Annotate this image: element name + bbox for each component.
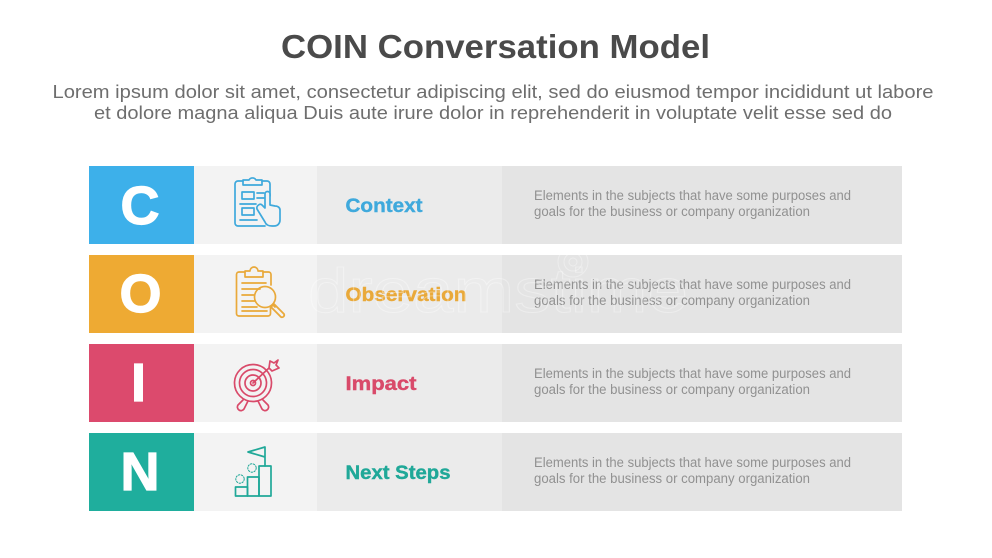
letter tile C: C [120, 176, 160, 236]
icon: steps with flag [236, 447, 271, 496]
description: Impact: goals for the business or company organization [534, 382, 810, 397]
letter tile N: N [120, 442, 160, 502]
description: Context: Elements in the subjects that have some purposes and [534, 188, 851, 203]
description: Observation: goals for the business or company organization [534, 293, 810, 308]
label: Impact: Impact [346, 374, 417, 395]
description: Next Steps [534, 455, 851, 486]
letter tile I [89, 344, 194, 422]
panel: Observation row [89, 255, 902, 333]
panel: Context row [89, 166, 902, 244]
subtitle text: Lorem ipsum dolor sit amet, consectetur adipiscing elit, sed do eiusmod tempor incididunt ut labore [52, 81, 934, 102]
description: Impact: Elements in the subjects that have some purposes and [534, 366, 851, 381]
description: Context: goals for the business or company organization [534, 204, 810, 219]
icon: clipboard with pointing hand [235, 178, 280, 226]
description: Impact [534, 366, 851, 397]
description: Observation [534, 277, 851, 308]
panel: Next Steps row [89, 433, 902, 511]
description: Next Steps: goals for the business or company organization [534, 471, 810, 486]
letter tile N [89, 433, 194, 511]
description: Observation: Elements in the subjects that have some purposes and [534, 277, 851, 292]
letter tile C [89, 166, 194, 244]
description: Context [534, 188, 851, 219]
letter tile O: O [119, 264, 162, 324]
icon: target with arrow [234, 360, 279, 411]
letter tile I: I [131, 353, 146, 413]
letter tile O [89, 255, 194, 333]
label: Next Steps: Next Steps [346, 463, 450, 484]
description: Next Steps: Elements in the subjects that have some purposes and [534, 455, 851, 470]
watermark: dreamstime [308, 257, 688, 326]
subtitle text [52, 81, 934, 123]
panel: Impact row [89, 344, 902, 422]
label: Context: Context [346, 196, 423, 217]
label: Observation: Observation [346, 285, 466, 306]
title: COIN Conversation Model [281, 28, 710, 65]
subtitle text: et dolore magna aliqua Duis aute irure dolor in reprehenderit in voluptate velit esse sed do [94, 102, 892, 123]
icon: clipboard with magnifier [236, 267, 284, 317]
